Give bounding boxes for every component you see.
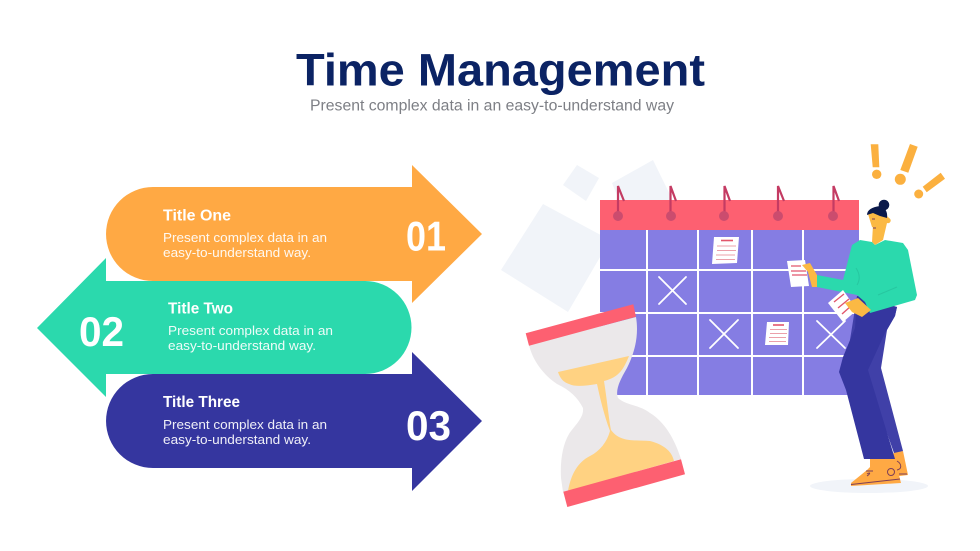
- sticky note: top: [712, 237, 739, 264]
- head: [868, 210, 891, 228]
- step 03 heading: Title Three: [163, 394, 240, 411]
- step 02 number: 02: [79, 308, 124, 355]
- caps: [526, 304, 636, 346]
- arrow panel: step 02: [37, 258, 412, 397]
- exclamation marks: [871, 144, 945, 198]
- step 03 description: Present complex data in an: [163, 418, 327, 432]
- calendar body: [600, 230, 859, 395]
- calendar grid: [600, 230, 859, 395]
- step 02 description: easy-to-understand way.: [168, 339, 316, 353]
- title: Time Management: [296, 44, 705, 96]
- sweater folds: [856, 268, 897, 295]
- subtitle: Present complex data in an easy-to-understand way: [310, 98, 674, 114]
- hair: [867, 206, 887, 218]
- trousers: far leg: [850, 296, 903, 453]
- person: [787, 200, 917, 486]
- step 01 description: Present complex data in an: [163, 231, 327, 245]
- sticky note: lower: [765, 322, 789, 345]
- shoe: [851, 459, 901, 486]
- neck: [872, 223, 887, 245]
- arrow panel: step 01: [106, 165, 482, 303]
- lower hand: [845, 298, 871, 317]
- arrow panel: step 03: [106, 352, 482, 491]
- step 01 number: 01: [406, 212, 446, 260]
- glass: [529, 317, 681, 492]
- note in hand: [787, 260, 809, 287]
- calendar rings: [618, 186, 839, 215]
- hourglass: [526, 304, 685, 507]
- calendar header: [600, 200, 859, 230]
- step 01 heading: Title One: [163, 208, 231, 224]
- hair bun: [879, 200, 889, 210]
- step 02 description: Present complex data in an: [168, 324, 333, 338]
- step 01 description: easy-to-understand way.: [163, 246, 311, 260]
- face details: [872, 219, 876, 228]
- step 02 heading: Title Two: [168, 300, 233, 318]
- step 03 description: easy-to-understand way.: [163, 433, 311, 447]
- paper in other hand: [828, 290, 857, 322]
- cross marks: [659, 277, 845, 348]
- background squares: [501, 160, 675, 312]
- calendar: [600, 186, 859, 395]
- floor shadow: [810, 479, 928, 493]
- step 03 number: 03: [406, 402, 451, 449]
- sand: [558, 356, 674, 491]
- upper hand: [802, 263, 817, 287]
- trousers: near leg: [839, 296, 897, 459]
- sweater: [817, 240, 917, 313]
- back shoe: [884, 451, 908, 478]
